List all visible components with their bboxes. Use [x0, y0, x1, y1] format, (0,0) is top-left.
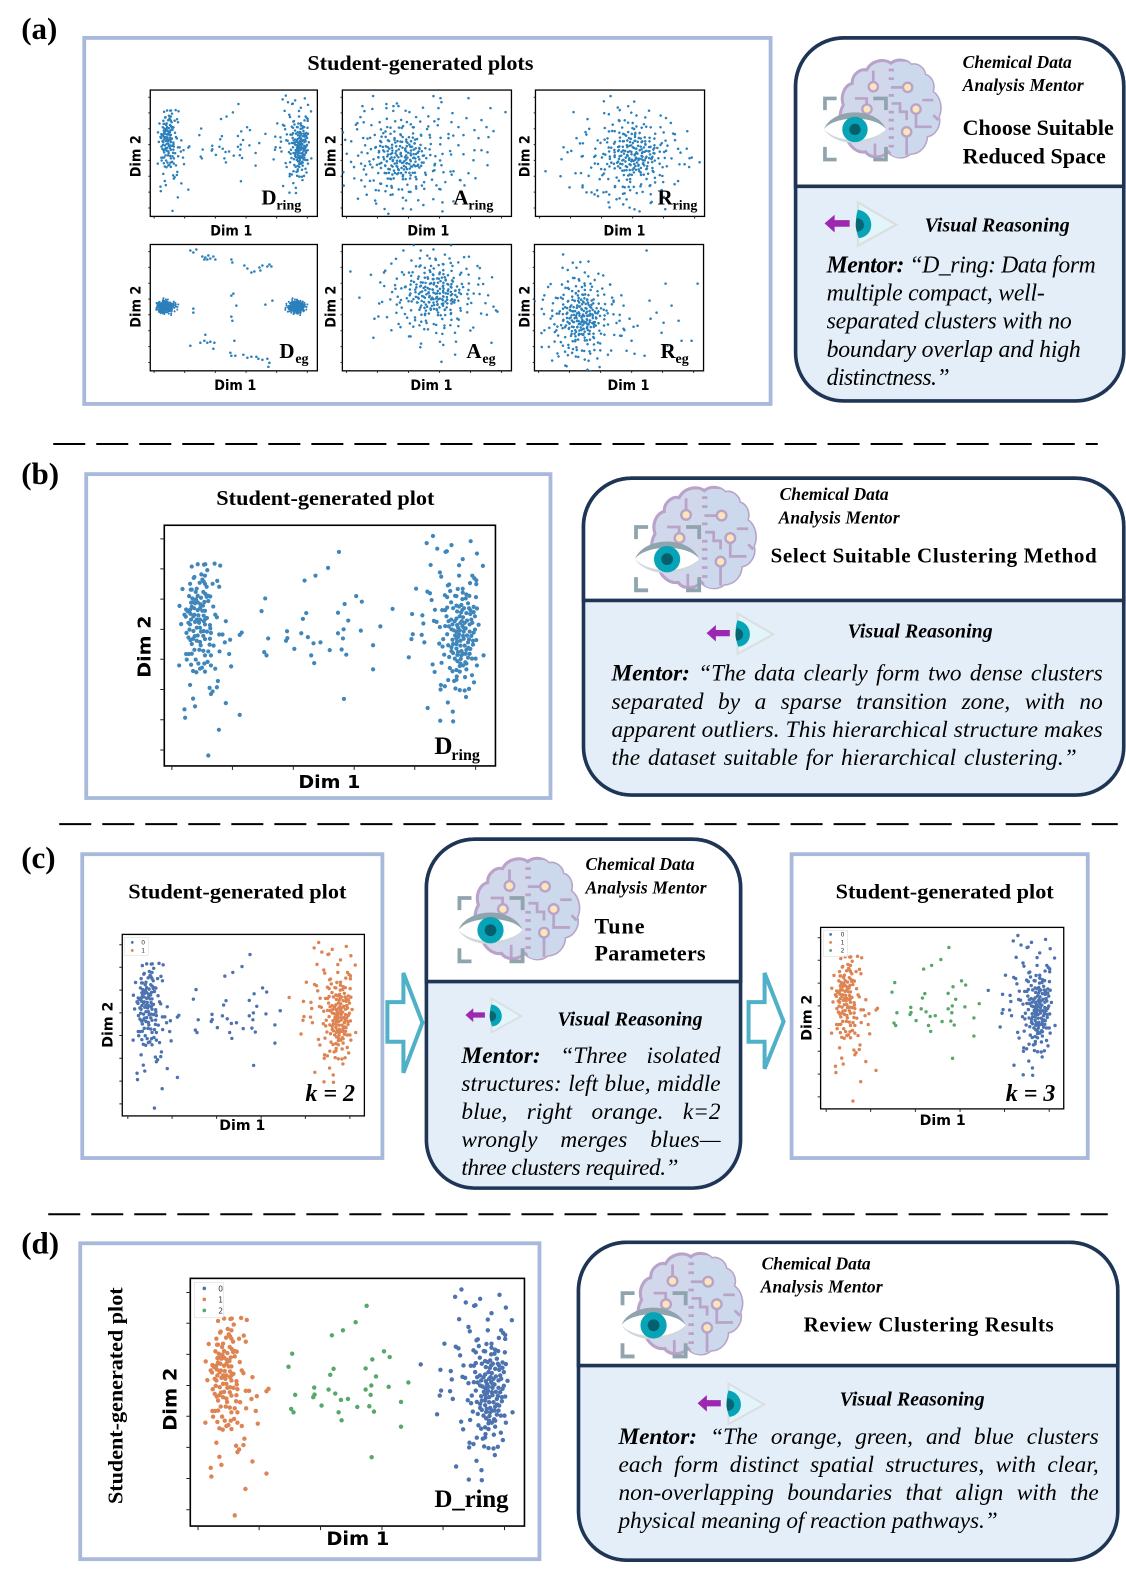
mentor quote: [611, 661, 1103, 771]
task heading: Tune: [594, 913, 645, 938]
plot: D eg: Dim 1: [214, 378, 256, 394]
axis label x: Dim 1: [298, 772, 360, 793]
scatter plot k=3: [818, 927, 1064, 1112]
scatter plot k=3 D ring: 2: [218, 1306, 223, 1315]
axis label x: Dim 1: [219, 1118, 265, 1134]
mentor quote: wrongly merges blues—: [461, 1127, 721, 1153]
scatter plot k=3 D ring: 1: [218, 1295, 223, 1304]
heading: Student-generated plot: [836, 879, 1055, 903]
mentor quote: Mentor: “D_ring: Data form: [826, 253, 1096, 279]
mentor quote: each form distinct spatial structures, with clear,: [619, 1452, 1099, 1478]
mentor quote: Mentor: “Three isolated: [460, 1043, 721, 1069]
visual reasoning heading: Visual Reasoning: [840, 1389, 985, 1411]
card title: mentor name line 2: Analysis Mentor: [778, 507, 900, 527]
axis label y: Dim 2: [134, 616, 155, 678]
scatter plot k=2: [119, 934, 364, 1119]
mentor quote: Mentor: “The orange, green, and blue clusters: [618, 1424, 1099, 1450]
mentor quote: three clusters required.”: [461, 1155, 679, 1181]
plot: R ring: [517, 88, 705, 239]
mentor card (a): [796, 38, 1124, 401]
mentor quote: structures: left blue, middle: [461, 1071, 721, 1097]
scatter plot D ring: ring: [451, 747, 480, 764]
icon: small eye with arrow: [698, 1384, 764, 1424]
card title: mentor name line 2: Analysis Mentor: [962, 75, 1084, 95]
scatter plot k=2: 1: [141, 947, 145, 954]
card title: mentor name line 2: Analysis Mentor: [584, 877, 707, 897]
plot: R ring: R: [658, 185, 674, 209]
mentor quote: multiple compact, well-: [827, 281, 1045, 307]
plot: A ring: A: [453, 185, 469, 209]
plot: A eg: Dim 1: [410, 378, 452, 394]
icon: brain with eye: [635, 487, 755, 590]
arrow: left to mentor: [387, 973, 422, 1073]
mentor quote: separated by a sparse transition zone, with no: [612, 689, 1103, 715]
plot: A eg: [324, 244, 512, 390]
panel: plot with k=2: [82, 854, 382, 1158]
plot: D ring: ring: [276, 198, 301, 213]
visual reasoning heading: Visual Reasoning: [848, 621, 993, 643]
plot: R ring: Dim 2: [517, 135, 533, 177]
mentor card (d): [578, 1242, 1118, 1560]
task heading: Select Suitable Clustering Method: [771, 543, 1097, 567]
icon: brain with eye: [621, 1253, 742, 1356]
plot: A eg: eg: [482, 352, 496, 367]
mentor quote: non-overlapping boundaries that align with the: [619, 1480, 1099, 1506]
card title: mentor name: Chemical Data: [585, 854, 695, 874]
mentor quote: [826, 253, 1096, 391]
panel: plot with k=3: [792, 854, 1088, 1158]
plot: R eg: eg: [676, 352, 689, 367]
icon: brain with eye: [824, 60, 940, 160]
rotated heading: Student-generated plot: [103, 1287, 127, 1504]
plot: D eg: eg: [295, 352, 309, 367]
axis label y: Dim 2: [800, 995, 816, 1041]
plot: D eg: [128, 244, 317, 394]
scatter plot D ring: [160, 525, 495, 770]
mentor quote: blue, right orange. k=2: [461, 1099, 721, 1125]
visual reasoning heading: Visual Reasoning: [925, 214, 1070, 236]
mentor quote: Mentor: “The data clearly form two dense clusters: [611, 661, 1103, 687]
plot: R eg: [517, 244, 704, 394]
plot: D ring: [128, 90, 317, 239]
mentor card (b): [583, 478, 1124, 795]
plot: D eg: Dim 2: [128, 286, 144, 328]
plot: A ring: [323, 90, 511, 239]
card title: mentor name: Chemical Data: [963, 52, 1072, 72]
task heading line 2: Parameters: [594, 940, 706, 965]
scatter plot k=3: k = 3: [1006, 1081, 1055, 1107]
mentor quote: [617, 1424, 1099, 1534]
task heading: Choose Suitable: [963, 115, 1114, 140]
plot: A eg: Dim 2: [323, 286, 339, 328]
mentor quote: distinctness.”: [827, 365, 950, 391]
icon: small eye with arrow: [707, 614, 773, 654]
scatter plot k=2: 0: [141, 939, 145, 946]
icon: small eye with arrow: [825, 202, 896, 246]
panel: student-generated plot (b): [86, 474, 550, 798]
card title: mentor name: Chemical Data: [780, 484, 889, 504]
icon: small eye with arrow: [465, 999, 521, 1032]
section label (d): (d): [21, 1225, 59, 1260]
plot: A ring: Dim 2: [323, 135, 339, 177]
section label (b): (b): [21, 456, 59, 491]
scatter plot k=3 D ring: [186, 1278, 524, 1530]
plot: D ring: Dim 1: [210, 223, 252, 239]
plot: D ring: D: [261, 185, 277, 209]
plot: D eg: D: [279, 339, 295, 363]
plot: R eg: Dim 1: [608, 378, 650, 394]
heading: Student-generated plot: [216, 486, 435, 510]
axis label y: Dim 2: [159, 1368, 181, 1431]
scatter plot k=3 D ring: 0: [218, 1284, 223, 1293]
mentor card (c): [426, 839, 741, 1188]
plot: R ring: Dim 1: [604, 223, 646, 239]
mentor quote: [460, 1043, 721, 1181]
plot: A eg: A: [466, 339, 482, 363]
task heading: Review Clustering Results: [804, 1312, 1054, 1337]
mentor quote: physical meaning of reaction pathways.”: [617, 1508, 998, 1534]
icon: brain with eye: [458, 858, 579, 961]
card title: mentor name line 2: Analysis Mentor: [760, 1276, 883, 1296]
task heading line 2: Reduced Space: [963, 143, 1106, 168]
mentor quote: separated clusters with no: [827, 309, 1072, 335]
scatter plot k=3: 1: [841, 939, 845, 946]
scatter plot k=3: 0: [841, 931, 845, 938]
mentor quote: boundary overlap and high: [827, 337, 1081, 363]
plot: R eg: Dim 2: [517, 286, 533, 328]
section label (a): (a): [21, 11, 57, 46]
mentor quote: apparent outliers. This hierarchical structure makes: [612, 717, 1103, 743]
axis label x: Dim 1: [920, 1113, 966, 1129]
card title: mentor name: Chemical Data: [762, 1253, 871, 1273]
scatter plot D ring: D: [434, 733, 452, 760]
scatter plot k=3: 2: [841, 947, 845, 954]
section label (c): (c): [21, 840, 56, 875]
mentor quote: the dataset suitable for hierarchical clustering.”: [612, 745, 1077, 771]
heading: Student-generated plot: [128, 879, 347, 903]
axis label y: Dim 2: [100, 1002, 116, 1048]
scatter plot k=3 D ring: D_ring: [434, 1486, 509, 1513]
scatter plot k=2: k = 2: [305, 1081, 355, 1107]
axis label x: Dim 1: [326, 1528, 389, 1550]
panel: student-generated plots (a): [84, 38, 771, 404]
visual reasoning heading: Visual Reasoning: [557, 1009, 703, 1031]
arrow: mentor to right: [749, 973, 784, 1069]
panel: student-generated plot (d): [80, 1243, 539, 1559]
plot: R ring: ring: [673, 198, 697, 213]
heading: student-generated plots: Student-generated plots: [307, 51, 533, 75]
plot: A ring: Dim 1: [407, 223, 449, 239]
plot: A ring: ring: [468, 198, 493, 213]
plot: R eg: R: [661, 339, 677, 363]
plot: D ring: Dim 2: [128, 135, 144, 177]
